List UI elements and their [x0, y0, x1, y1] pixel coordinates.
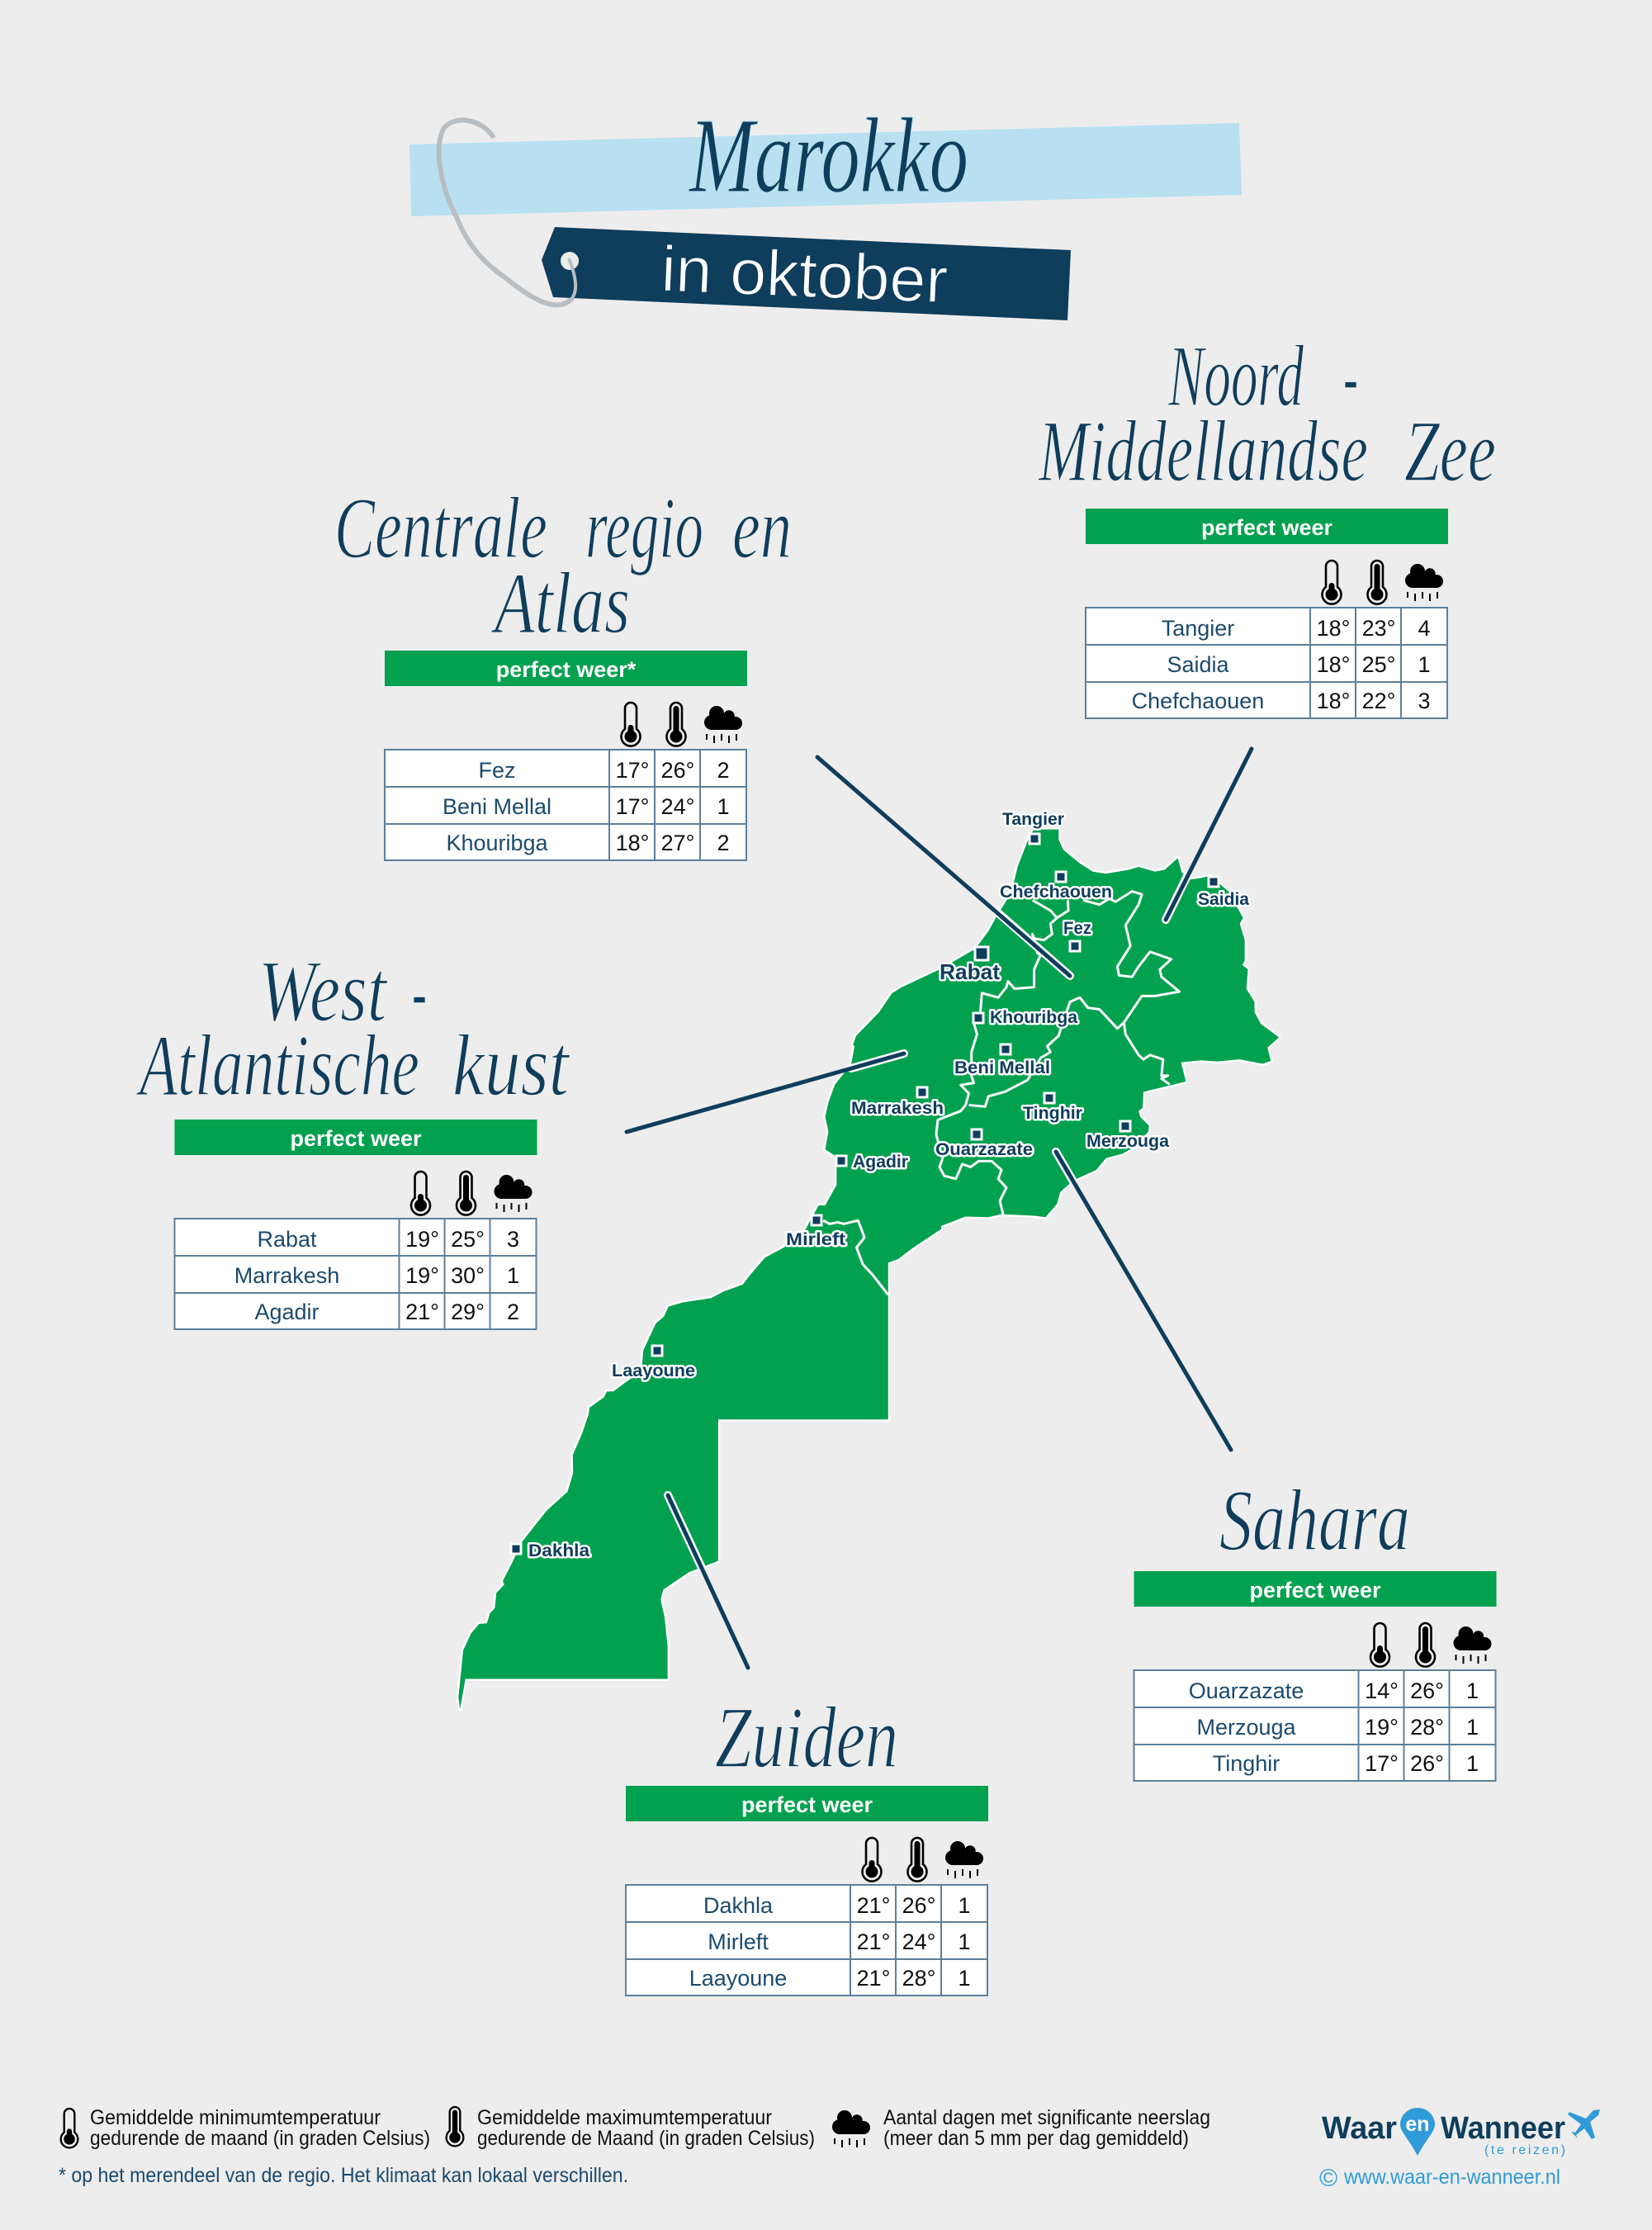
weather icons: [1323, 561, 1443, 604]
city: Merzouga: Merzouga: [1086, 1132, 1169, 1151]
weather table: 4: [1418, 616, 1431, 641]
status bar: [626, 1786, 988, 1821]
panel: Noord: [1086, 509, 1448, 718]
weather table: Fez: [478, 758, 516, 783]
legend: maximum temperature: [447, 2106, 815, 2150]
weather table: 1: [1466, 1678, 1479, 1703]
tag string end: [561, 258, 575, 305]
subtitle: in oktober: in oktober: [660, 232, 949, 317]
legend: minimum temperature: Gemiddelde minimumtemperatuur: [90, 2106, 381, 2129]
leader: West: [627, 1053, 904, 1132]
weather table: 29°: [451, 1300, 485, 1324]
city: Beni Mellal: Beni Mellal: [954, 1058, 1050, 1077]
weather table: Laayoune: [689, 1966, 787, 1991]
legend: rainfall: [832, 2106, 1210, 2150]
status bar: perfect weer: [1249, 1578, 1381, 1603]
weather table: 1: [958, 1893, 971, 1918]
heading: West - Atlantische kust: -: [412, 943, 427, 1039]
city: Rabat: Rabat: [940, 959, 1000, 984]
leader: Sahara: [1056, 1152, 1231, 1450]
weather table: 3: [1418, 689, 1431, 713]
city: Tangier: Tangier: [1002, 810, 1064, 829]
legend: [59, 2106, 1210, 2187]
logo tagline: (te reizen): [1484, 2143, 1565, 2157]
city markers and labels: [511, 810, 1249, 1560]
leader: Zuiden: [668, 1495, 748, 1668]
heading: Noord - Middellandse Zee: -: [1343, 328, 1358, 424]
weather table: Agadir: [254, 1300, 320, 1324]
weather table: Dakhla: [703, 1893, 774, 1918]
weather table: 1: [958, 1966, 971, 1991]
weather table: Saidia: [1167, 652, 1230, 677]
website: www.waar-en-wanneer.nl: [1343, 2166, 1560, 2189]
city: Saidia: [1198, 877, 1249, 909]
city: Ouarzazate: Ouarzazate: [935, 1140, 1033, 1159]
city: Tangier: [1002, 810, 1064, 844]
footnote: * op het merendeel van de regio. Het klimaat kan lokaal verschillen.: [59, 2164, 628, 2187]
weather table: 1: [1418, 652, 1431, 677]
city: Rabat: [940, 947, 1000, 984]
weather table: Khouribga: [446, 831, 549, 855]
title block: [409, 97, 1242, 320]
status bar: [385, 651, 747, 686]
weather table: [1086, 608, 1447, 718]
city: Beni Mellal: [954, 1044, 1050, 1077]
website: ©: [1319, 2165, 1337, 2192]
weather table: 24°: [661, 794, 694, 819]
weather table: Marrakesh: [234, 1263, 339, 1288]
legend: minimum temperature: gedurende de maand (in graden Celsius): [90, 2127, 430, 2150]
weather table: 18°: [1317, 616, 1350, 641]
weather table: 17°: [1365, 1751, 1399, 1776]
heading: Sahara: Sahara: [1219, 1472, 1410, 1569]
legend: minimum temperature: [61, 2106, 430, 2150]
heading: Centrale regio en Atlas: [334, 480, 792, 651]
weather table: 28°: [902, 1966, 935, 1991]
weather table: 3: [507, 1227, 519, 1252]
heading: West - Atlantische kust: kust: [452, 1017, 570, 1114]
weather table: 18°: [1317, 689, 1350, 713]
heading: Centrale regio en Atlas: Atlas: [490, 555, 630, 651]
weather table: 2: [507, 1300, 519, 1324]
legend: rainfall: (meer dan 5 mm per dag gemiddeld): [883, 2127, 1189, 2150]
weather table: 18°: [616, 831, 649, 855]
city: Saidia: Saidia: [1198, 890, 1249, 909]
heading: Noord - Middellandse Zee: Middellandse: [1038, 403, 1368, 500]
city: Chefchaouen: [1000, 872, 1112, 902]
heading: Noord - Middellandse Zee: Zee: [1404, 403, 1496, 500]
weather table: Chefchaouen: [1132, 689, 1264, 713]
weather table: Tinghir: [1213, 1751, 1280, 1776]
status bar: perfect weer: [1201, 515, 1333, 540]
city: Marrakesh: Marrakesh: [851, 1099, 944, 1118]
weather table: 21°: [857, 1966, 890, 1991]
leader: Noord: [1166, 749, 1252, 920]
weather table: [385, 750, 746, 860]
weather table: Merzouga: [1196, 1715, 1297, 1740]
weather table: 2: [717, 758, 730, 783]
weather table: Mirleft: [708, 1929, 769, 1954]
city: Tinghir: [1023, 1093, 1082, 1123]
weather table: 19°: [405, 1263, 439, 1288]
weather table: 14°: [1365, 1678, 1399, 1703]
weather table: 26°: [902, 1893, 935, 1918]
weather table: 26°: [661, 758, 694, 783]
status bar: [1134, 1571, 1496, 1607]
weather icons: [862, 1838, 983, 1882]
weather table: 26°: [1410, 1678, 1444, 1703]
map outline: [458, 830, 1279, 1709]
logo pin: [1400, 2108, 1435, 2156]
weather icons: [1370, 1623, 1491, 1667]
weather table: [1134, 1670, 1496, 1781]
logo word: Waar: Waar: [1322, 2111, 1397, 2146]
leader: Centrale regio: [817, 757, 1070, 976]
status bar: [175, 1120, 537, 1155]
weather table: Rabat: [257, 1227, 317, 1252]
weather table: 24°: [902, 1929, 935, 1954]
map fill: [458, 830, 1279, 1709]
tag: [542, 227, 1071, 320]
weather table: 19°: [405, 1227, 439, 1252]
city: Khouribga: Khouribga: [990, 1008, 1077, 1027]
map of Morocco: [458, 830, 1279, 1709]
weather table: 28°: [1410, 1715, 1444, 1740]
logo pin: en: [1405, 2113, 1430, 2136]
weather table: 1: [1466, 1715, 1479, 1740]
tag hole: [561, 252, 579, 270]
Mirleft region border: [823, 1220, 888, 1295]
weather icons: [411, 1172, 532, 1215]
weather table: Beni Mellal: [443, 794, 551, 819]
heading: Centrale regio en Atlas: regio: [585, 480, 703, 576]
heading: West - Atlantische kust: [136, 943, 570, 1114]
city: Merzouga: [1086, 1121, 1169, 1151]
weather table: 1: [958, 1929, 971, 1954]
leader lines: [627, 749, 1252, 1668]
logo plane: [1568, 2109, 1600, 2139]
legend: maximum temperature: gedurende de Maand (in graden Celsius): [477, 2127, 815, 2150]
city: Tinghir: Tinghir: [1023, 1104, 1082, 1123]
weather table: 27°: [661, 831, 694, 855]
weather table: 25°: [1362, 652, 1395, 677]
logo word: Wanneer: Wanneer: [1441, 2111, 1565, 2146]
weather table: 2: [717, 831, 730, 855]
status bar: [1086, 509, 1448, 544]
city: Mirleft: Mirleft: [786, 1230, 845, 1249]
weather icons: [621, 703, 742, 746]
weather table: 17°: [616, 794, 649, 819]
weather table: 26°: [1410, 1751, 1444, 1776]
weather table: 21°: [405, 1300, 439, 1324]
weather table: 22°: [1362, 689, 1395, 713]
weather table: 1: [507, 1263, 519, 1288]
heading: Centrale regio en Atlas: en: [732, 480, 792, 576]
weather table: 23°: [1362, 616, 1395, 641]
title: Marokko: Marokko: [689, 97, 968, 215]
city: Ouarzazate: [935, 1129, 1033, 1159]
weather table: [626, 1885, 987, 1996]
heading: Centrale regio en Atlas: Centrale: [334, 480, 547, 576]
legend: rainfall: Aantal dagen met significante neerslag: [883, 2106, 1210, 2129]
city: Fez: [1063, 919, 1091, 951]
weather table: 1: [717, 794, 730, 819]
tag string: [439, 121, 575, 305]
weather table: Tangier: [1162, 616, 1234, 641]
weather table: 21°: [857, 1929, 890, 1954]
weather table: 21°: [857, 1893, 890, 1918]
logo: Waar en Wanneer: [1319, 2108, 1600, 2192]
weather table: Ouarzazate: [1189, 1678, 1304, 1703]
city: Laayoune: Laayoune: [612, 1361, 695, 1380]
weather table: 1: [1466, 1751, 1479, 1776]
city: Fez: Fez: [1063, 919, 1091, 938]
legend: maximum temperature: Gemiddelde maximumtemperatuur: [477, 2106, 772, 2129]
weather table: 17°: [616, 758, 649, 783]
heading: Noord - Middellandse Zee: Noord: [1167, 328, 1304, 424]
city: Chefchaouen: Chefchaouen: [1000, 883, 1112, 902]
panel: Sahara: [1134, 1571, 1496, 1781]
status bar: perfect weer*: [496, 657, 637, 682]
panel: Centrale regio: [385, 651, 747, 860]
status bar: perfect weer: [290, 1126, 422, 1151]
city: Dakhla: Dakhla: [528, 1541, 589, 1560]
panel: Zuiden: [626, 1786, 988, 1996]
weather table: 30°: [451, 1263, 485, 1288]
weather table: [175, 1219, 537, 1329]
panel: West: [175, 1120, 537, 1329]
heading: West - Atlantische kust: Atlantische: [136, 1017, 419, 1114]
weather table: 25°: [451, 1227, 485, 1252]
city: Mirleft: [786, 1215, 845, 1249]
title band: [409, 123, 1242, 216]
city: Laayoune: [612, 1346, 695, 1380]
region borders: [936, 892, 1180, 1214]
city: Agadir: Agadir: [853, 1153, 908, 1172]
heading: Zuiden: Zuiden: [715, 1689, 898, 1786]
city: Marrakesh: [851, 1087, 944, 1118]
heading: West - Atlantische kust: West: [258, 943, 388, 1039]
weather table: 18°: [1317, 652, 1350, 677]
status bar: perfect weer: [741, 1792, 873, 1817]
heading: Noord - Middellandse Zee: [1038, 328, 1496, 500]
weather table: 19°: [1365, 1715, 1399, 1740]
